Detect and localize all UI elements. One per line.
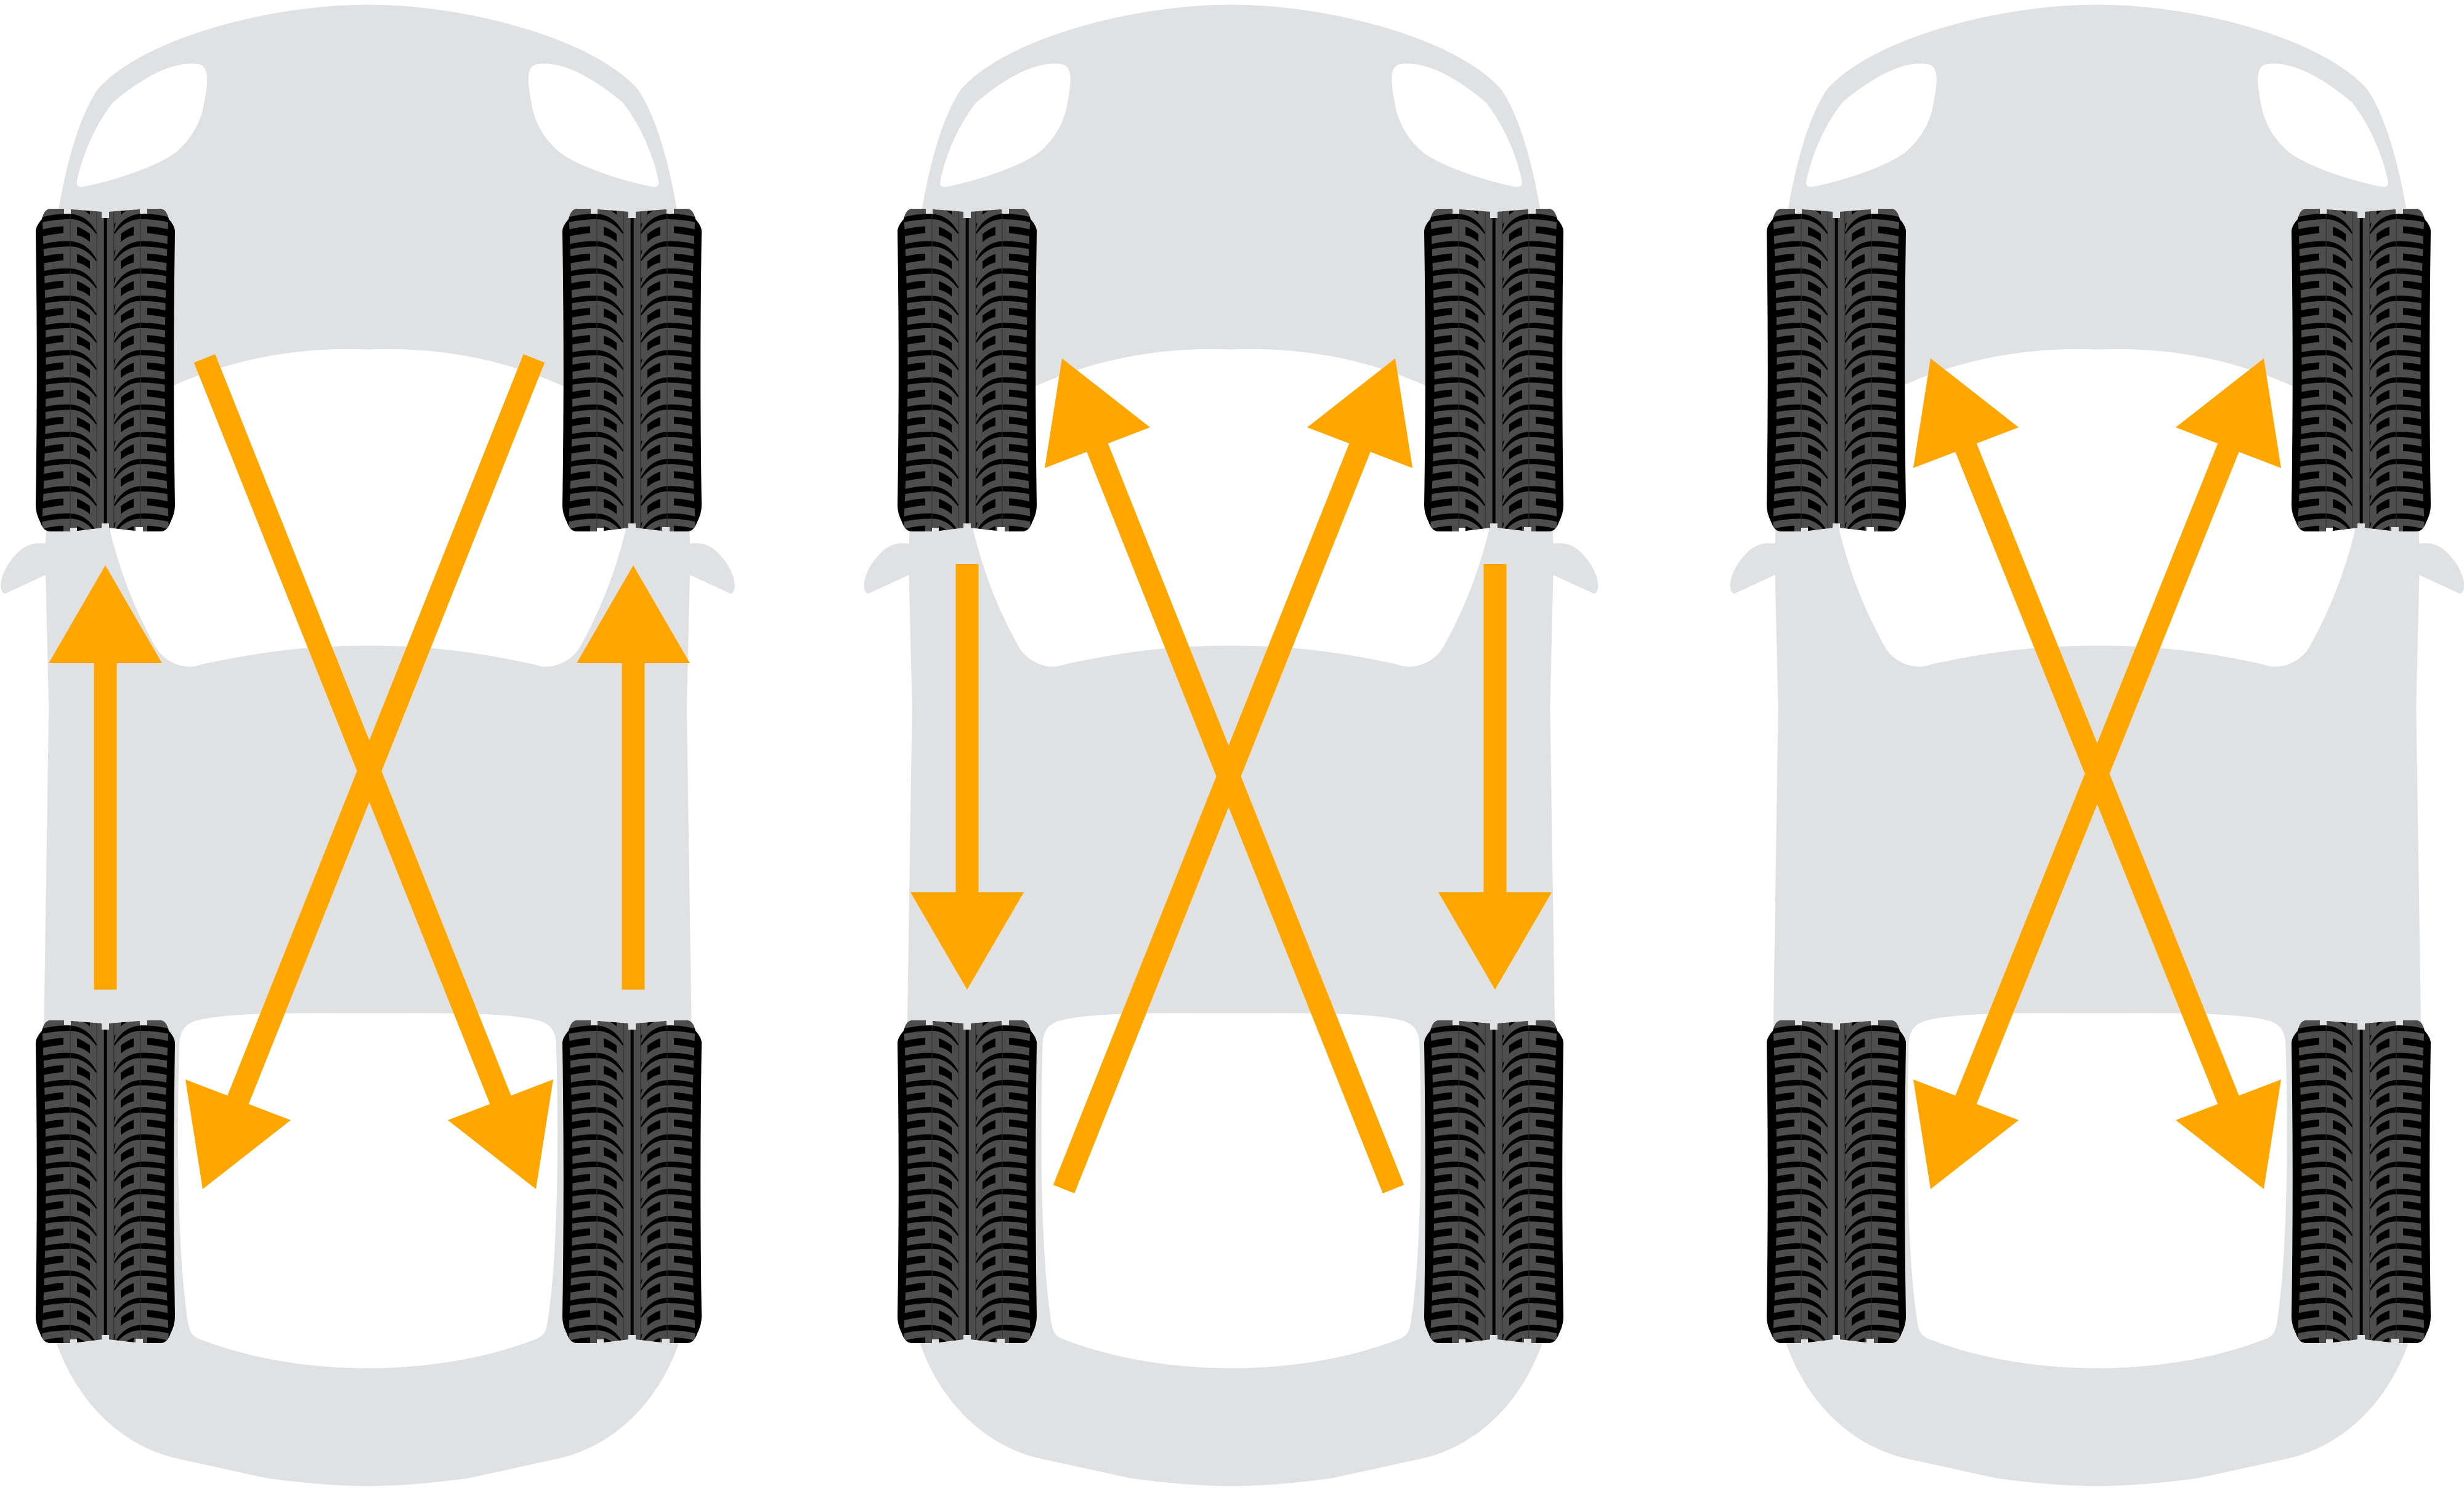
tire: rear left bbox=[896, 998, 1038, 1353]
tire: front right bbox=[2290, 187, 2432, 541]
car silhouette bbox=[864, 5, 1598, 1486]
arrow: rear right to front right bbox=[577, 565, 690, 990]
tire: rear right bbox=[2290, 998, 2432, 1353]
tire: front left bbox=[1765, 187, 1907, 541]
arrow: rear left to front left bbox=[49, 565, 162, 990]
tire: front left bbox=[896, 187, 1038, 541]
panel: rotation pattern 3 bbox=[1730, 5, 2464, 1486]
arrow: double-headed, front right and rear left bbox=[1913, 358, 2281, 1189]
arrow: front right to rear right bbox=[1438, 564, 1552, 990]
car silhouette bbox=[1730, 5, 2464, 1486]
tire: front right bbox=[1423, 187, 1565, 541]
tire: rear left bbox=[34, 998, 176, 1353]
tire: rear right bbox=[1423, 998, 1565, 1353]
arrow: front left to rear left bbox=[910, 564, 1024, 990]
car silhouette bbox=[1, 5, 735, 1486]
tire: front left bbox=[34, 187, 176, 541]
arrow: front right to rear left bbox=[185, 354, 545, 1189]
tire: rear left bbox=[1765, 998, 1907, 1353]
panel: rotation pattern 1 bbox=[1, 5, 735, 1486]
arrow: double-headed, front left and rear right bbox=[1913, 358, 2281, 1189]
arrow: front left to rear right bbox=[194, 354, 553, 1189]
panel: rotation pattern 2 bbox=[864, 5, 1598, 1486]
arrow: rear right to front left bbox=[1045, 358, 1404, 1193]
tire: rear right bbox=[561, 998, 703, 1353]
arrow: rear left to front right bbox=[1053, 358, 1412, 1193]
tire: front right bbox=[561, 187, 703, 541]
